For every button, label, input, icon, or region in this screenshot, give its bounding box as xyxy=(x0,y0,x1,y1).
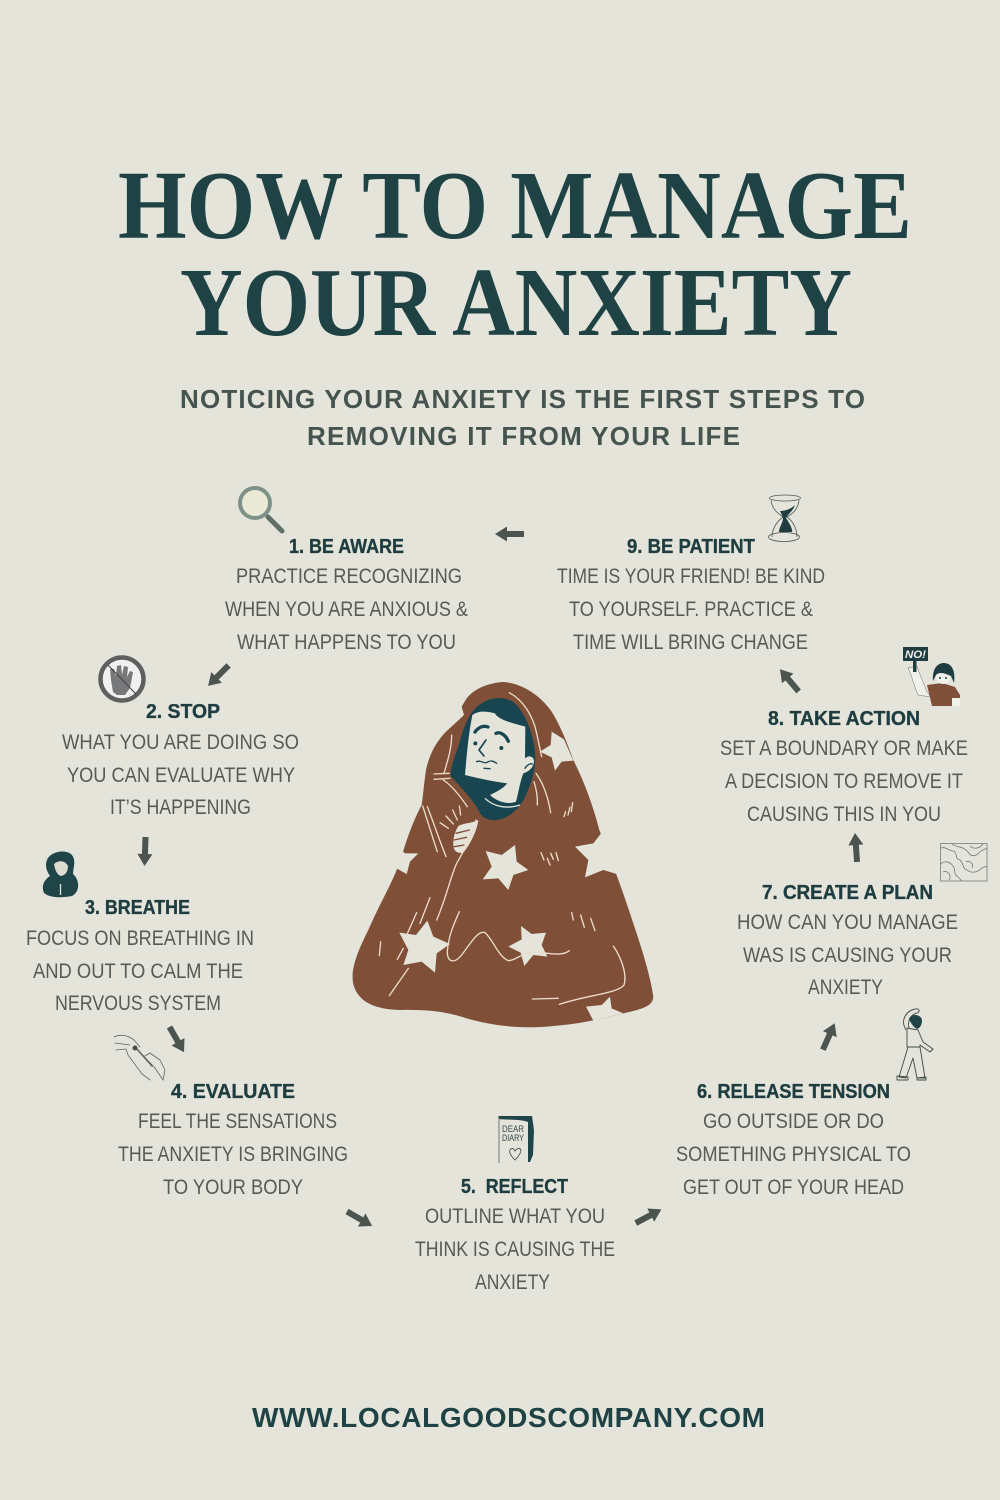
step 6: release tension: 6. RELEASE TENSION xyxy=(697,1081,890,1103)
arrow: step 8 to step 9 xyxy=(774,664,804,696)
arrow: step 4 to step 5 xyxy=(343,1205,376,1232)
icon: map xyxy=(940,844,987,881)
step 2: stop xyxy=(62,658,299,819)
step 8: take action: A DECISION TO REMOVE IT xyxy=(725,770,963,793)
step 4: evaluate: 4. EVALUATE xyxy=(171,1081,295,1103)
facial features xyxy=(475,726,532,769)
face xyxy=(465,712,534,803)
icon: magnifying glass xyxy=(240,488,282,531)
blanket xyxy=(353,682,653,1027)
step 6: release tension: SOMETHING PHYSICAL TO xyxy=(676,1143,911,1166)
step 8: take action: 8. TAKE ACTION xyxy=(768,708,920,730)
step 6: release tension xyxy=(676,1009,933,1199)
step 6: release tension: GET OUT OF YOUR HEAD xyxy=(683,1176,904,1199)
step 3: breathe: AND OUT TO CALM THE xyxy=(33,960,243,983)
step 4: evaluate xyxy=(114,1035,348,1199)
collar line xyxy=(485,798,520,807)
icon: woman breathing xyxy=(43,852,78,897)
title: HOW TO MANAGE xyxy=(118,152,912,260)
subtitle xyxy=(180,384,865,451)
icon: hands holding match xyxy=(114,1035,165,1080)
hood interior and hair xyxy=(451,698,535,820)
step 2: stop: WHAT YOU ARE DOING SO xyxy=(62,731,299,754)
footer website url: WWW.LOCALGOODSCOMPANY.COM xyxy=(252,1402,765,1433)
step 8: take action: SET A BOUNDARY OR MAKE xyxy=(720,737,968,760)
step 7: create a plan: ANXIETY xyxy=(808,976,883,999)
step 1: be aware: PRACTICE RECOGNIZING xyxy=(236,565,462,588)
step 8: take action: CAUSING THIS IN YOU xyxy=(747,803,941,826)
arrow: step 5 to step 6 xyxy=(632,1203,665,1230)
step 5: reflect: 5. REFLECT xyxy=(461,1176,568,1198)
arrow: step 1 to step 2 xyxy=(203,660,234,691)
step 7: create a plan: WAS IS CAUSING YOUR xyxy=(743,944,952,967)
step 5: reflect: ANXIETY xyxy=(475,1271,550,1294)
step 3: breathe: 3. BREATHE xyxy=(85,897,190,919)
icon: stretching person xyxy=(897,1009,933,1080)
arrow: step 9 to step 1 xyxy=(495,526,524,542)
step 7: create a plan xyxy=(737,844,987,999)
icon: dear diary notebook xyxy=(498,1116,534,1163)
blanket stars xyxy=(393,732,623,1021)
step 1: be aware: WHAT HAPPENS TO YOU xyxy=(237,631,456,654)
step 4: evaluate: FEEL THE SENSATIONS xyxy=(138,1110,337,1133)
title xyxy=(118,152,912,357)
step 2: stop: YOU CAN EVALUATE WHY xyxy=(67,764,295,787)
step 5: reflect: OUTLINE WHAT YOU xyxy=(425,1205,605,1228)
icon: person with no sign xyxy=(903,647,960,706)
arrow: step 7 to step 8 xyxy=(848,833,865,862)
step 4: evaluate: TO YOUR BODY xyxy=(163,1176,303,1199)
subtitle: REMOVING IT FROM YOUR LIFE xyxy=(307,421,740,451)
step 5: reflect: THINK IS CAUSING THE xyxy=(415,1238,615,1261)
step 1: be aware: WHEN YOU ARE ANXIOUS & xyxy=(225,598,468,621)
step 2: stop: IT’S HAPPENING xyxy=(110,796,251,819)
icon: person with no sign: NO! xyxy=(905,649,926,661)
step 4: evaluate: THE ANXIETY IS BRINGING xyxy=(118,1143,348,1166)
icon: stop hand xyxy=(100,658,144,700)
step 1: be aware: 1. BE AWARE xyxy=(289,536,404,558)
step 9: be patient: TIME WILL BRING CHANGE xyxy=(573,631,808,654)
arrow: step 2 to step 3 xyxy=(137,837,153,866)
step 9: be patient: TIME IS YOUR FRIEND! BE KIND xyxy=(557,565,825,588)
title: YOUR ANXIETY xyxy=(180,249,852,357)
hand xyxy=(453,820,478,853)
step 9: be patient: TO YOURSELF. PRACTICE & xyxy=(569,598,813,621)
arrow: step 6 to step 7 xyxy=(816,1020,842,1053)
icon: dear diary notebook: DEAR xyxy=(502,1124,524,1134)
step 3: breathe: FOCUS ON BREATHING IN xyxy=(26,927,254,950)
central illustration: anxious man wrapped in starry blanket xyxy=(353,682,653,1027)
step 8: take action xyxy=(720,647,968,826)
step 3: breathe: NERVOUS SYSTEM xyxy=(55,992,221,1015)
blanket fold lines xyxy=(379,693,625,1004)
step 2: stop: 2. STOP xyxy=(146,701,220,723)
arrow: step 3 to step 4 xyxy=(163,1023,190,1056)
step 1: be aware xyxy=(225,488,468,654)
step 9: be patient: 9. BE PATIENT xyxy=(627,536,755,558)
subtitle: NOTICING YOUR ANXIETY IS THE FIRST STEPS TO xyxy=(180,384,865,414)
step 7: create a plan: HOW CAN YOU MANAGE xyxy=(737,911,958,934)
step 5: reflect xyxy=(415,1116,615,1294)
step 3: breathe xyxy=(26,852,254,1015)
step 6: release tension: GO OUTSIDE OR DO xyxy=(703,1110,884,1133)
step 9: be patient xyxy=(557,495,825,654)
icon: dear diary notebook: DIARY xyxy=(502,1133,524,1143)
step 7: create a plan: 7. CREATE A PLAN xyxy=(762,882,933,904)
icon: hourglass xyxy=(768,495,800,542)
